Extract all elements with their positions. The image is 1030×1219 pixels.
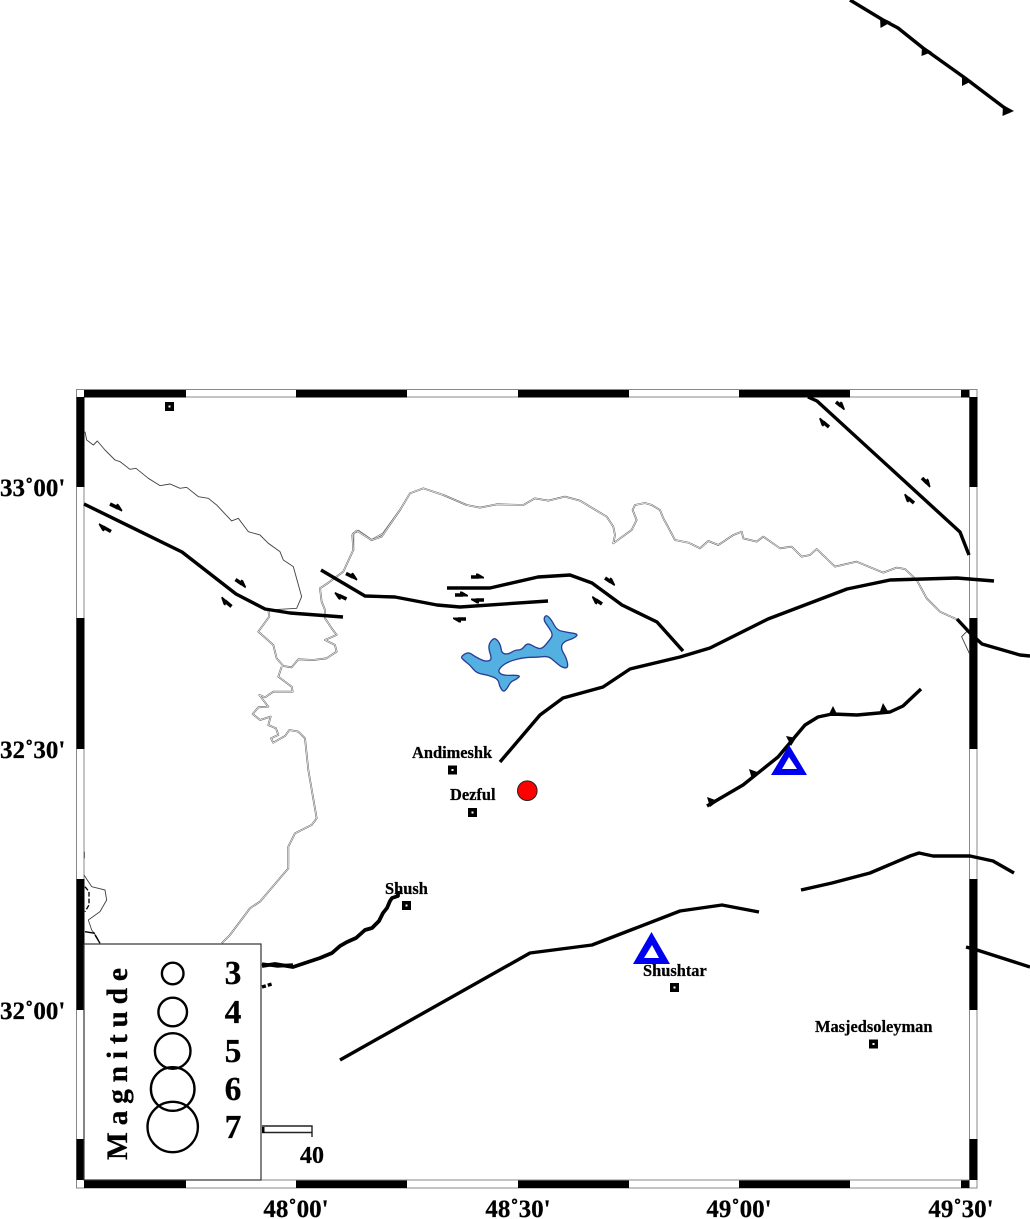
city labels [385,743,932,1036]
city labels: Shushtar [643,961,707,980]
city markers [165,402,878,1048]
city labels: Dezful [450,785,496,804]
city labels: Masjedsoleyman [815,1017,932,1036]
legend: magnitude: Magnitude [102,968,134,1160]
legend: magnitude [84,944,261,1180]
city labels: Andimeshk [412,743,493,762]
blue triangle: station near Shushtar [633,932,670,964]
latitude axis labels [0,475,65,1025]
map frame [76,390,978,1188]
city labels: Shush [385,879,428,898]
legend: magnitude: 7 [225,1109,241,1146]
latitude axis labels: 32˚30' [0,737,65,764]
scale bar: 40 [300,1143,324,1169]
scale bar [262,1126,324,1169]
longitude axis labels [263,1196,994,1219]
legend: magnitude: 5 [225,1033,241,1070]
blue triangle: station near thrust fault [771,745,807,775]
lake [462,616,577,691]
legend: magnitude: 4 [225,994,242,1031]
legend: magnitude: 3 [225,955,241,992]
legend: magnitude: 6 [225,1071,241,1108]
thrust fault teeth [707,17,1014,807]
latitude axis labels: 33˚00' [0,475,65,502]
strike-slip arrows [103,402,927,619]
rivers [84,432,969,943]
faults [84,0,1030,1060]
epicentre: red circle [518,781,537,800]
latitude axis labels: 32˚00' [0,998,65,1025]
